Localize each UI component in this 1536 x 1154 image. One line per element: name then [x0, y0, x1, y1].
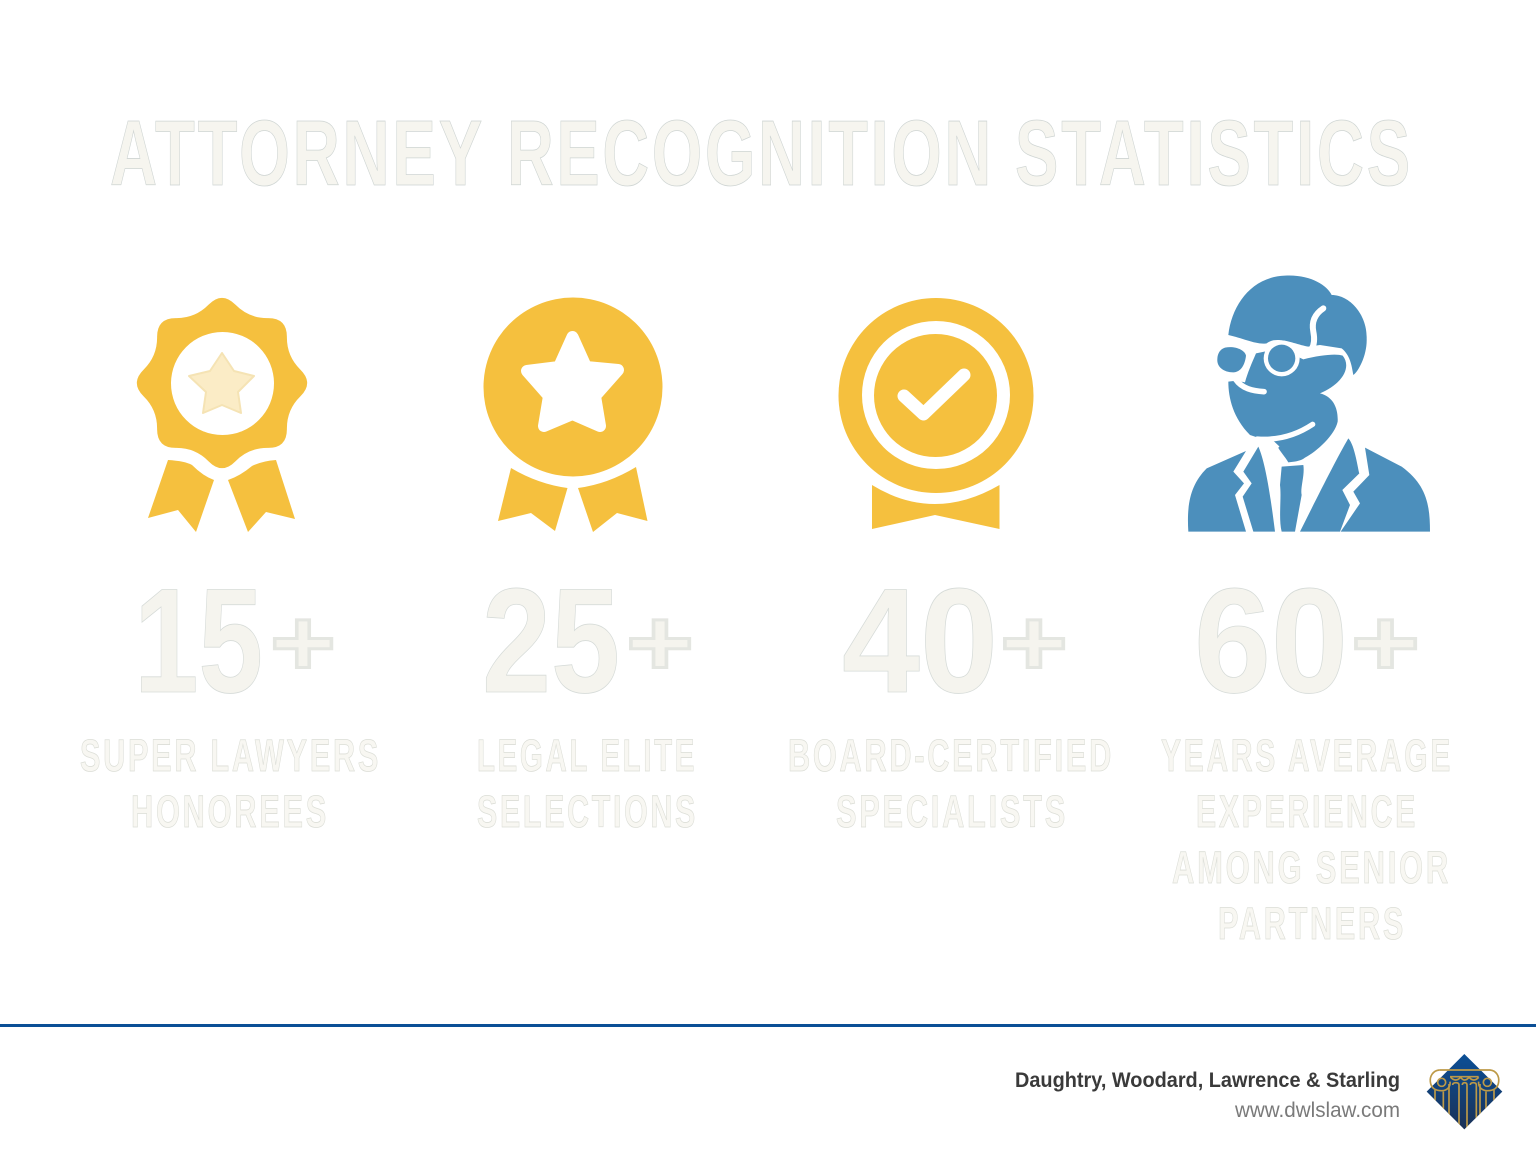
footer firm name: Daughtry, Woodard, Lawrence & Starling — [1015, 1069, 1400, 1092]
icon: rosette badge with star — [137, 298, 307, 532]
label: years average experience among senior partners: EXPERIENCE — [1196, 786, 1418, 837]
footer rule — [0, 1024, 1536, 1027]
panel: years average experience — [1161, 276, 1453, 949]
title: RECOGNITION — [507, 101, 994, 205]
label: Legal Elite selections: LEGAL ELITE — [477, 730, 697, 781]
stat number: 15+: + — [270, 590, 336, 695]
stat number: 25+: 25 — [482, 557, 620, 724]
icon: medal with check mark — [838, 298, 1034, 529]
logo: diamond with ionic column — [1427, 1054, 1502, 1130]
footer website: www.dwlslaw.com — [1234, 1099, 1400, 1122]
stat number: 60+: 60 — [1194, 557, 1348, 724]
stat number: 15+: 15 — [134, 557, 263, 724]
label: years average experience among senior partners — [1161, 730, 1453, 949]
stat number: 40+: 40 — [842, 557, 998, 724]
stat number: 40+: + — [1000, 590, 1068, 695]
panel: board-certified specialists — [788, 298, 1114, 837]
panel: Super Lawyers honorees — [80, 298, 381, 837]
label: Super Lawyers honorees: SUPER LAWYERS — [80, 730, 381, 781]
label: Legal Elite selections — [477, 730, 698, 837]
label: board-certified specialists: BOARD-CERTIFIED — [788, 730, 1114, 781]
label: board-certified specialists: SPECIALISTS — [836, 786, 1068, 837]
icon: attorney with glasses — [1188, 276, 1430, 532]
title: ATTORNEY — [110, 101, 485, 205]
panel: Legal Elite selections — [477, 298, 698, 837]
label: board-certified specialists — [788, 730, 1114, 837]
label: years average experience among senior partners: PARTNERS — [1218, 898, 1406, 949]
label: Super Lawyers honorees: HONOREES — [131, 786, 329, 837]
icon: medal with star — [484, 298, 662, 532]
label: Super Lawyers honorees — [80, 730, 381, 837]
label: Legal Elite selections: SELECTIONS — [477, 786, 698, 837]
stat number: 60+: + — [1351, 590, 1420, 695]
stat number: 25+: + — [626, 590, 694, 695]
title — [110, 101, 1413, 205]
